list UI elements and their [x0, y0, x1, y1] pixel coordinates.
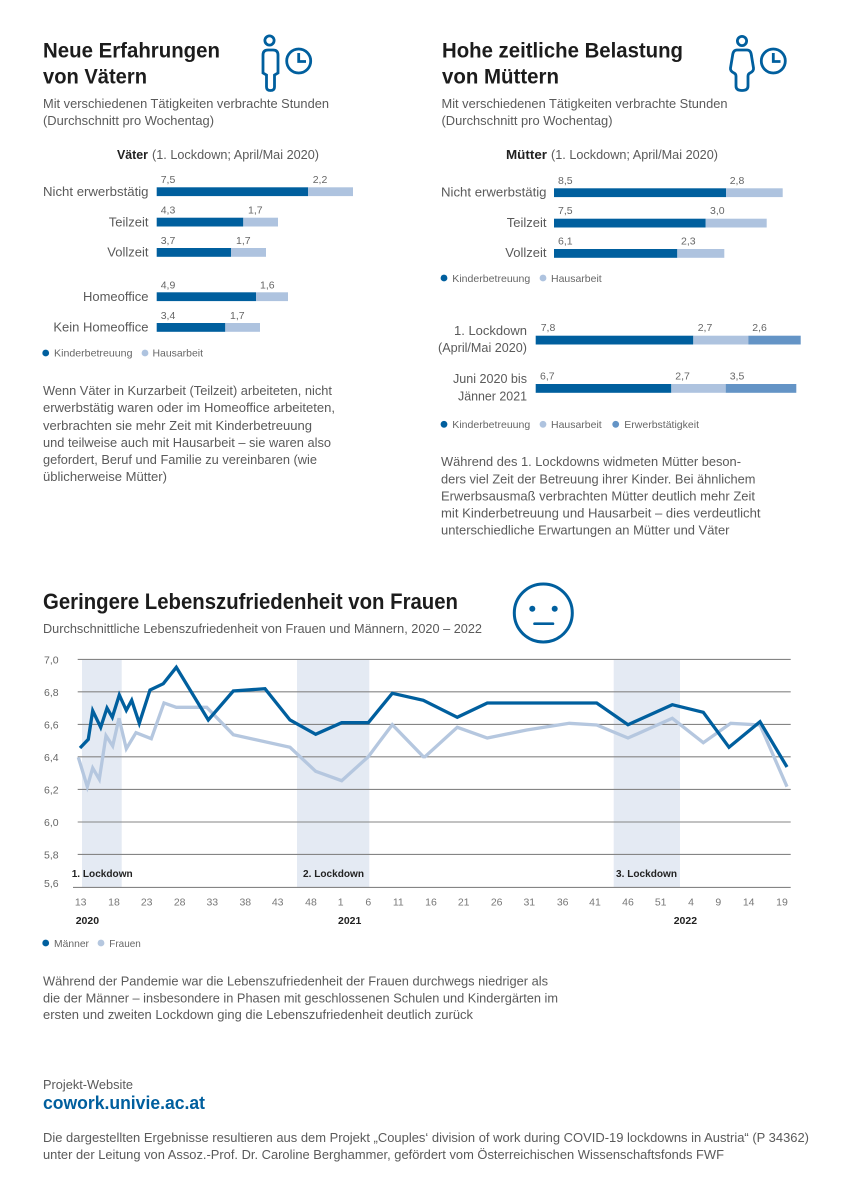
x axis labels: 26	[491, 896, 503, 908]
legend: fathers	[42, 348, 203, 360]
legend: mothers by employment	[441, 273, 602, 285]
x axis labels: 33	[206, 896, 218, 908]
x axis labels: 11	[393, 896, 404, 908]
x axis labels: 28	[174, 896, 186, 908]
row: Juni 2020 bis Jänner 2021: Jänner 2021	[458, 388, 527, 404]
text block: mothers: ders viel Zeit der Betreuung ihrer Kinder. Bei ähnlichem	[441, 472, 756, 486]
subtitle: mothers	[442, 96, 728, 128]
x axis labels: 9	[715, 896, 721, 908]
panel: footer	[43, 1077, 809, 1162]
subtitle: fathers: Mit verschiedenen Tätigkeiten verbrachte Stunden	[43, 96, 329, 111]
lockdown labels	[72, 868, 677, 880]
legend: mothers by employment: Hausarbeit	[551, 273, 602, 285]
text block: life satisfaction: die der Männer – insbesondere in Phasen mit geschlossenen Schulen und Kindergärten im	[43, 990, 558, 1006]
row: Nicht erwerbstätig	[43, 174, 353, 199]
x axis labels: 14	[743, 896, 755, 908]
legend: mothers by period: Erwerbstätigkeit	[624, 419, 699, 431]
legend: mothers by employment: Kinderbetreuung	[452, 273, 530, 285]
row: Juni 2020 bis Jänner 2021: 3,5	[730, 370, 744, 382]
x axis labels: 4	[688, 896, 694, 908]
x axis labels: 36	[557, 896, 569, 908]
row: Nicht erwerbstätig: Nicht erwerbstätig	[441, 184, 546, 200]
lockdown labels: 2. Lockdown	[303, 868, 364, 880]
heading: life satisfaction: Geringere Lebenszufriedenheit von Frauen	[43, 589, 458, 614]
credits	[43, 1130, 809, 1162]
bar chart: mothers by period	[438, 322, 801, 404]
icon: father with clock	[263, 36, 311, 90]
row: Nicht erwerbstätig: 2,8	[730, 175, 744, 187]
line chart: life satisfaction	[44, 654, 791, 927]
project website label: Projekt-Website	[43, 1077, 133, 1092]
text block: life satisfaction	[43, 974, 558, 1022]
row: 1. Lockdown: 7,8	[541, 322, 555, 334]
text block: fathers: und teilweise auch mit Hausarbeit – sie waren also	[43, 435, 331, 450]
bar chart: fathers	[43, 147, 353, 334]
text block: mothers: unterschiedliche Erwartungen an Mütter und Väter	[441, 522, 730, 538]
row: Vollzeit: Vollzeit	[505, 245, 547, 260]
text block: life satisfaction: Während der Pandemie war die Lebenszufriedenheit der Frauen durchwegs niedriger als	[43, 974, 548, 988]
text block: mothers	[441, 454, 761, 538]
credits: Die dargestellten Ergebnisse resultieren aus dem Projekt „Couples‘ division of work during COVID-19 lockdowns in Austria“ (P 34362)	[43, 1130, 809, 1145]
subtitle: life satisfaction: Durchschnittliche Lebenszufriedenheit von Frauen und Männern, 2020 – 2022	[43, 621, 482, 636]
bar chart: mothers by employment	[441, 147, 783, 260]
year labels: 2020	[76, 915, 99, 927]
panel: mothers	[438, 36, 801, 538]
subtitle: mothers: (Durchschnitt pro Wochentag)	[442, 113, 612, 128]
row: 1. Lockdown: 1. Lockdown	[454, 323, 527, 338]
x axis labels: 46	[622, 896, 634, 908]
y axis labels	[44, 654, 59, 890]
heading: mothers: Hohe zeitliche Belastung	[442, 38, 683, 62]
row: 1. Lockdown: 2,6	[752, 322, 767, 334]
legend: life satisfaction: Männer	[54, 938, 89, 950]
row: Teilzeit: Teilzeit	[507, 215, 547, 230]
row: Juni 2020 bis Jänner 2021: 6,7	[540, 370, 555, 382]
lockdown labels: 1. Lockdown	[72, 868, 133, 880]
y axis labels: 6,2	[44, 784, 59, 796]
chart title: Väter	[117, 147, 148, 162]
row: Teilzeit: 7,5	[558, 205, 573, 217]
y axis labels: 6,0	[44, 817, 59, 829]
x axis labels: 43	[272, 896, 284, 908]
panel: fathers	[42, 36, 353, 484]
row: Nicht erwerbstätig: Nicht erwerbstätig	[43, 184, 148, 199]
x axis labels: 31	[523, 896, 535, 908]
legend: life satisfaction: Frauen	[109, 938, 141, 950]
row: Teilzeit: 3,0	[710, 205, 725, 217]
row: Homeoffice: 1,6	[260, 280, 275, 292]
y axis labels: 5,8	[44, 850, 59, 862]
text block: fathers: gefordert, Beruf und Familie zu vereinbaren (wie	[43, 452, 317, 467]
row: Vollzeit: 1,7	[236, 235, 251, 247]
text block: fathers: erwerbstätig waren oder im Homeoffice arbeiteten,	[43, 400, 335, 415]
x axis labels: 18	[108, 896, 120, 908]
row: Teilzeit: 1,7	[248, 204, 263, 216]
legend: life satisfaction	[42, 938, 141, 950]
text block: fathers: Wenn Väter in Kurzarbeit (Teilzeit) arbeiteten, nicht	[43, 383, 332, 398]
chart title: (1. Lockdown; April/Mai 2020)	[152, 147, 319, 162]
row: Nicht erwerbstätig	[441, 175, 783, 200]
legend: fathers: Kinderbetreuung	[54, 348, 133, 360]
row: Kein Homeoffice: 1,7	[230, 310, 245, 322]
row: Homeoffice	[83, 280, 288, 304]
line: Frauen	[78, 703, 787, 787]
icon: neutral face	[514, 584, 572, 642]
row: Teilzeit: Teilzeit	[109, 214, 149, 230]
row: Vollzeit	[505, 236, 724, 260]
text block: fathers	[43, 383, 335, 484]
row: Vollzeit: 3,7	[161, 235, 175, 247]
x axis labels: 41	[589, 896, 601, 908]
row: Juni 2020 bis Jänner 2021: 2,7	[675, 370, 690, 382]
row: Nicht erwerbstätig: 8,5	[558, 175, 573, 187]
row: Teilzeit	[109, 204, 278, 230]
x axis labels: 1	[338, 896, 344, 908]
y axis labels: 5,6	[44, 878, 59, 890]
lockdown labels: 3. Lockdown	[616, 868, 677, 880]
row: Homeoffice: 4,9	[161, 280, 175, 292]
x axis labels: 6	[365, 896, 371, 908]
x axis labels: 38	[239, 896, 251, 908]
row: Juni 2020 bis Jänner 2021	[453, 370, 796, 404]
y axis labels: 7,0	[44, 654, 59, 666]
row: 1. Lockdown	[438, 322, 801, 355]
row: 1. Lockdown: 2,7	[698, 322, 712, 334]
row: Juni 2020 bis Jänner 2021: Juni 2020 bis	[453, 371, 527, 386]
row: Teilzeit: 4,3	[161, 204, 175, 216]
text block: life satisfaction: ersten und zweiten Lockdown ging die Lebenszufriedenheit deutlich zurück	[43, 1007, 473, 1022]
text block: mothers: Erwerbsausmaß verbrachten Mütter deutlich mehr Zeit	[441, 488, 755, 504]
row: Vollzeit	[107, 235, 266, 260]
y axis labels: 6,8	[44, 687, 59, 699]
y axis labels: 6,4	[44, 752, 59, 764]
credits: unter der Leitung von Assoz.-Prof. Dr. Caroline Berghammer, gefördert vom Österreichischen Wissenschaftsfonds FWF	[43, 1147, 724, 1162]
x axis labels: 13	[75, 896, 87, 908]
text block: fathers: verbrachten sie mehr Zeit mit Kinderbetreuung	[43, 418, 312, 433]
row: Kein Homeoffice: Kein Homeoffice	[53, 320, 148, 334]
y axis labels: 6,6	[44, 720, 59, 732]
heading: mothers: von Müttern	[442, 64, 559, 88]
legend: mothers by period: Hausarbeit	[551, 419, 602, 431]
row: Vollzeit: 2,3	[681, 236, 696, 248]
heading: fathers	[43, 38, 220, 88]
row: Nicht erwerbstätig: 7,5	[161, 174, 175, 186]
row: Vollzeit: 6,1	[558, 236, 573, 248]
x axis labels: 48	[305, 896, 317, 908]
legend: mothers by period: Kinderbetreuung	[452, 419, 530, 431]
heading: fathers: Neue Erfahrungen	[43, 38, 220, 62]
row: 1. Lockdown: (April/Mai 2020)	[438, 340, 527, 355]
chart title: (1. Lockdown; April/Mai 2020)	[551, 147, 718, 162]
text block: fathers: üblicherweise Mütter)	[43, 469, 167, 484]
x axis labels: 16	[425, 896, 437, 908]
text block: mothers: mit Kinderbetreuung und Hausarbeit – dies verdeutlicht	[441, 506, 761, 520]
legend: mothers by period	[441, 419, 699, 431]
x axis labels: 19	[776, 896, 788, 908]
project website link: cowork.univie.ac.at	[43, 1093, 205, 1113]
heading: mothers	[442, 38, 683, 88]
row: Teilzeit	[507, 205, 767, 230]
x axis labels: 23	[141, 896, 153, 908]
chart title: Mütter	[506, 147, 547, 162]
subtitle: fathers: (Durchschnitt pro Wochentag)	[43, 113, 214, 128]
row: Kein Homeoffice	[53, 310, 260, 334]
year labels: 2022	[674, 915, 697, 927]
row: Kein Homeoffice: 3,4	[161, 310, 175, 322]
subtitle: fathers	[43, 96, 329, 128]
row: Homeoffice: Homeoffice	[83, 289, 148, 304]
lockdown bands	[82, 659, 680, 887]
x axis labels: 51	[655, 896, 667, 908]
x axis labels: 21	[458, 896, 470, 908]
row: Vollzeit: Vollzeit	[107, 244, 149, 260]
icon: mother with clock	[730, 36, 785, 90]
year labels: 2021	[338, 915, 362, 927]
line: Männer	[80, 667, 787, 767]
year labels	[76, 915, 697, 927]
x axis labels	[75, 896, 788, 908]
legend: fathers: Hausarbeit	[152, 348, 203, 360]
panel: life satisfaction	[42, 584, 791, 1022]
subtitle: mothers: Mit verschiedenen Tätigkeiten verbrachte Stunden	[442, 96, 728, 111]
text block: mothers: Während des 1. Lockdowns widmeten Mütter beson-	[441, 454, 741, 469]
heading: fathers: von Vätern	[43, 64, 147, 88]
row: Nicht erwerbstätig: 2,2	[313, 174, 327, 186]
